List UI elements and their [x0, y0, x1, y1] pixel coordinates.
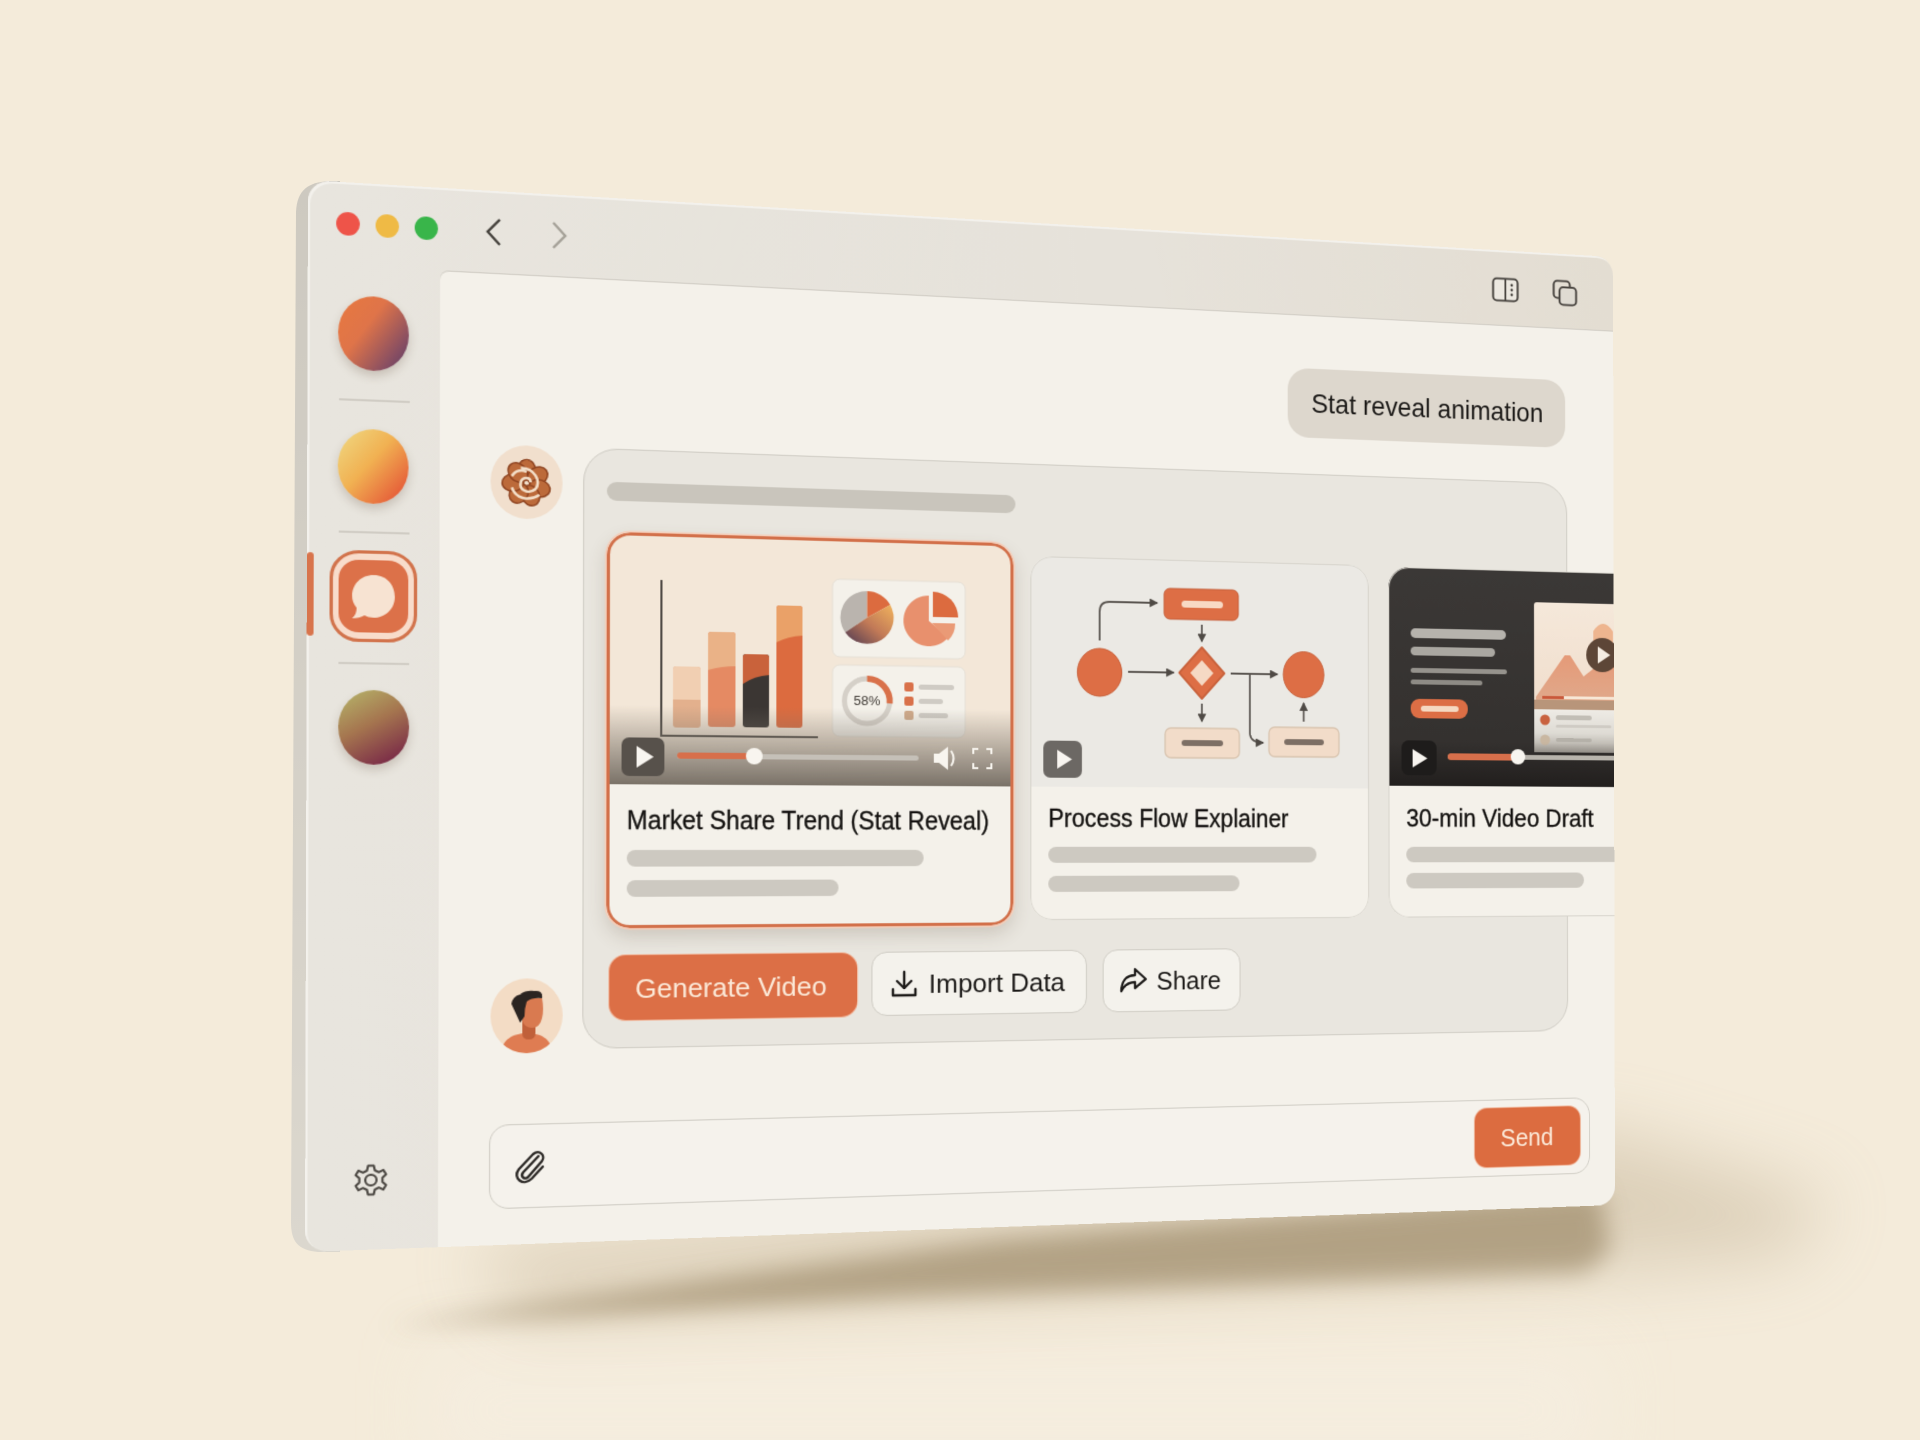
pie charts tile: [833, 579, 965, 659]
icon: person: [503, 990, 550, 1054]
chart thumbnail with player controls: [609, 536, 1011, 787]
content pane: [438, 271, 1615, 1247]
assistant avatar: [490, 444, 563, 520]
icon: settings gear: [354, 1164, 388, 1196]
message input box: [489, 1097, 1590, 1209]
assistant response panel: [582, 448, 1568, 1049]
play button: [622, 737, 664, 776]
description placeholder lines: [1406, 846, 1614, 888]
user message bubble: [1288, 368, 1565, 448]
button: share: [1103, 948, 1241, 1012]
button label: Generate Video: [635, 971, 827, 1004]
bar chart: [661, 580, 818, 738]
sidebar conversation orb 2: [338, 428, 409, 505]
traffic light: minimise: [376, 214, 399, 238]
icon: download: [890, 970, 918, 998]
flow diagram thumbnail: [1032, 558, 1368, 788]
sidebar conversation orb 1: [338, 295, 409, 372]
response heading placeholder: [607, 482, 1015, 513]
traffic light: close: [336, 211, 360, 236]
description placeholder lines: [626, 850, 924, 897]
app window: [305, 180, 1615, 1252]
video thumbnail: [1388, 567, 1614, 788]
icon: paperclip: [515, 1150, 546, 1184]
button label: Share: [1156, 967, 1221, 996]
donut chart tile: [832, 665, 965, 738]
card title: 30-min Video Draft: [1406, 803, 1594, 833]
traffic light: zoom: [415, 216, 438, 240]
icon: forward arrow: [552, 222, 568, 249]
icon: volume: [934, 747, 954, 770]
button: send: [1475, 1106, 1580, 1168]
button label: Import Data: [929, 967, 1065, 999]
progress bar: [677, 747, 919, 766]
icon: chat bubble: [352, 574, 396, 619]
icon: share arrow: [1119, 967, 1148, 994]
icon: swirl logo: [500, 458, 552, 507]
sidebar active chat button: [329, 549, 417, 643]
card 3: 30-min video draft: [1388, 567, 1713, 918]
message text: Stat reveal animation: [1311, 388, 1543, 429]
card title: Process Flow Explainer: [1048, 803, 1289, 833]
card 2: process flow explainer: [1030, 556, 1369, 920]
sidebar conversation orb 3: [338, 690, 409, 765]
button: import data: [871, 950, 1087, 1016]
description placeholder lines: [1048, 846, 1316, 892]
button: generate video: [609, 953, 857, 1020]
user avatar: [490, 978, 563, 1054]
icon: split panel: [1492, 276, 1520, 303]
donut chart tile: 58%: [895, 729, 926, 746]
card 1: market share trend (selected): [606, 532, 1013, 928]
icon: back arrow: [485, 218, 502, 246]
chat icon tile: [338, 559, 408, 633]
active tab indicator: [307, 552, 314, 636]
icon: copy windows: [1552, 279, 1578, 307]
button label: Send: [1500, 1124, 1553, 1152]
card title: Market Share Trend (Stat Reveal): [627, 804, 989, 836]
icon: fullscreen: [973, 749, 991, 768]
